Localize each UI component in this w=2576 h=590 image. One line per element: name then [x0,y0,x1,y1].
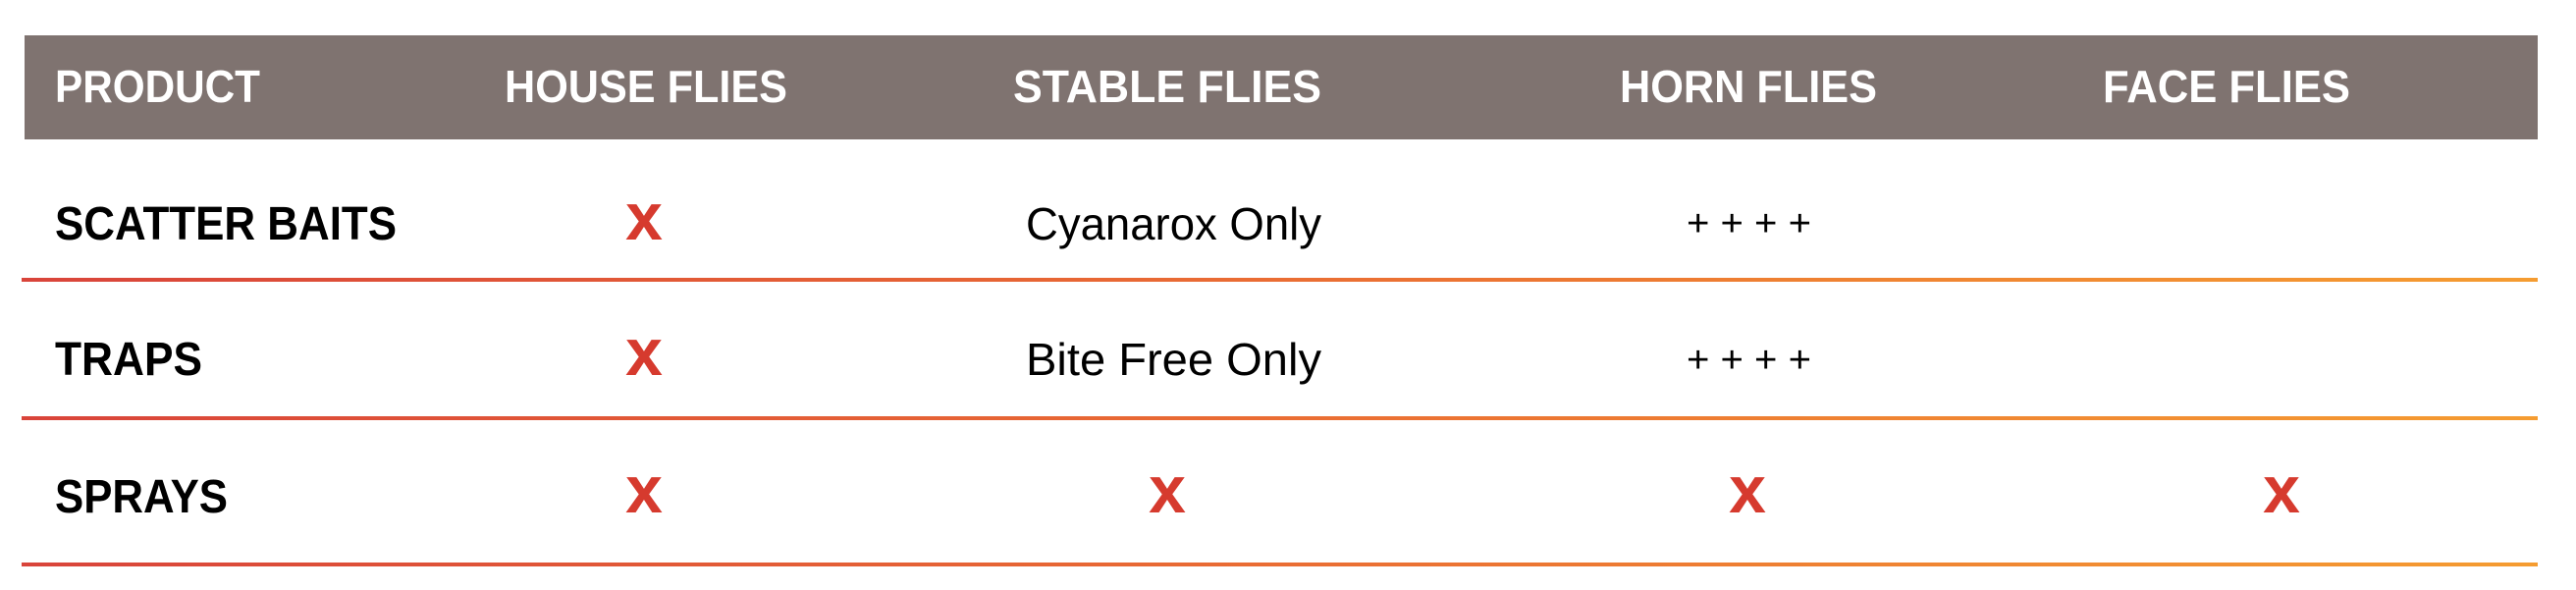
stable text: Cyanarox Only [1026,198,1321,249]
header bar [25,35,2538,139]
row: traps: TRAPS [55,334,202,386]
row: scatter baits [55,180,1811,254]
mark: house x: x [625,453,663,527]
stable text: Bite Free Only [1026,334,1321,385]
row: sprays: SPRAYS [55,471,228,523]
header: face flies: FACE FLIES [2103,61,2350,112]
header: product: PRODUCT [55,61,260,112]
row: sprays [55,453,2300,527]
row: scatter baits: SCATTER BAITS [55,198,397,250]
header: horn flies: HORN FLIES [1620,61,1877,112]
mark: house x: x [625,315,663,390]
horn plus: + + + + [1687,340,1811,381]
mark: face x: x [2263,453,2300,527]
mark: horn x: x [1729,453,1766,527]
header: stable flies: STABLE FLIES [1013,61,1321,112]
horn plus: + + + + [1687,203,1811,244]
mark: stable x: x [1149,453,1186,527]
mark: house x: x [625,180,663,254]
row: traps [55,315,1811,390]
header: house flies: HOUSE FLIES [505,61,787,112]
